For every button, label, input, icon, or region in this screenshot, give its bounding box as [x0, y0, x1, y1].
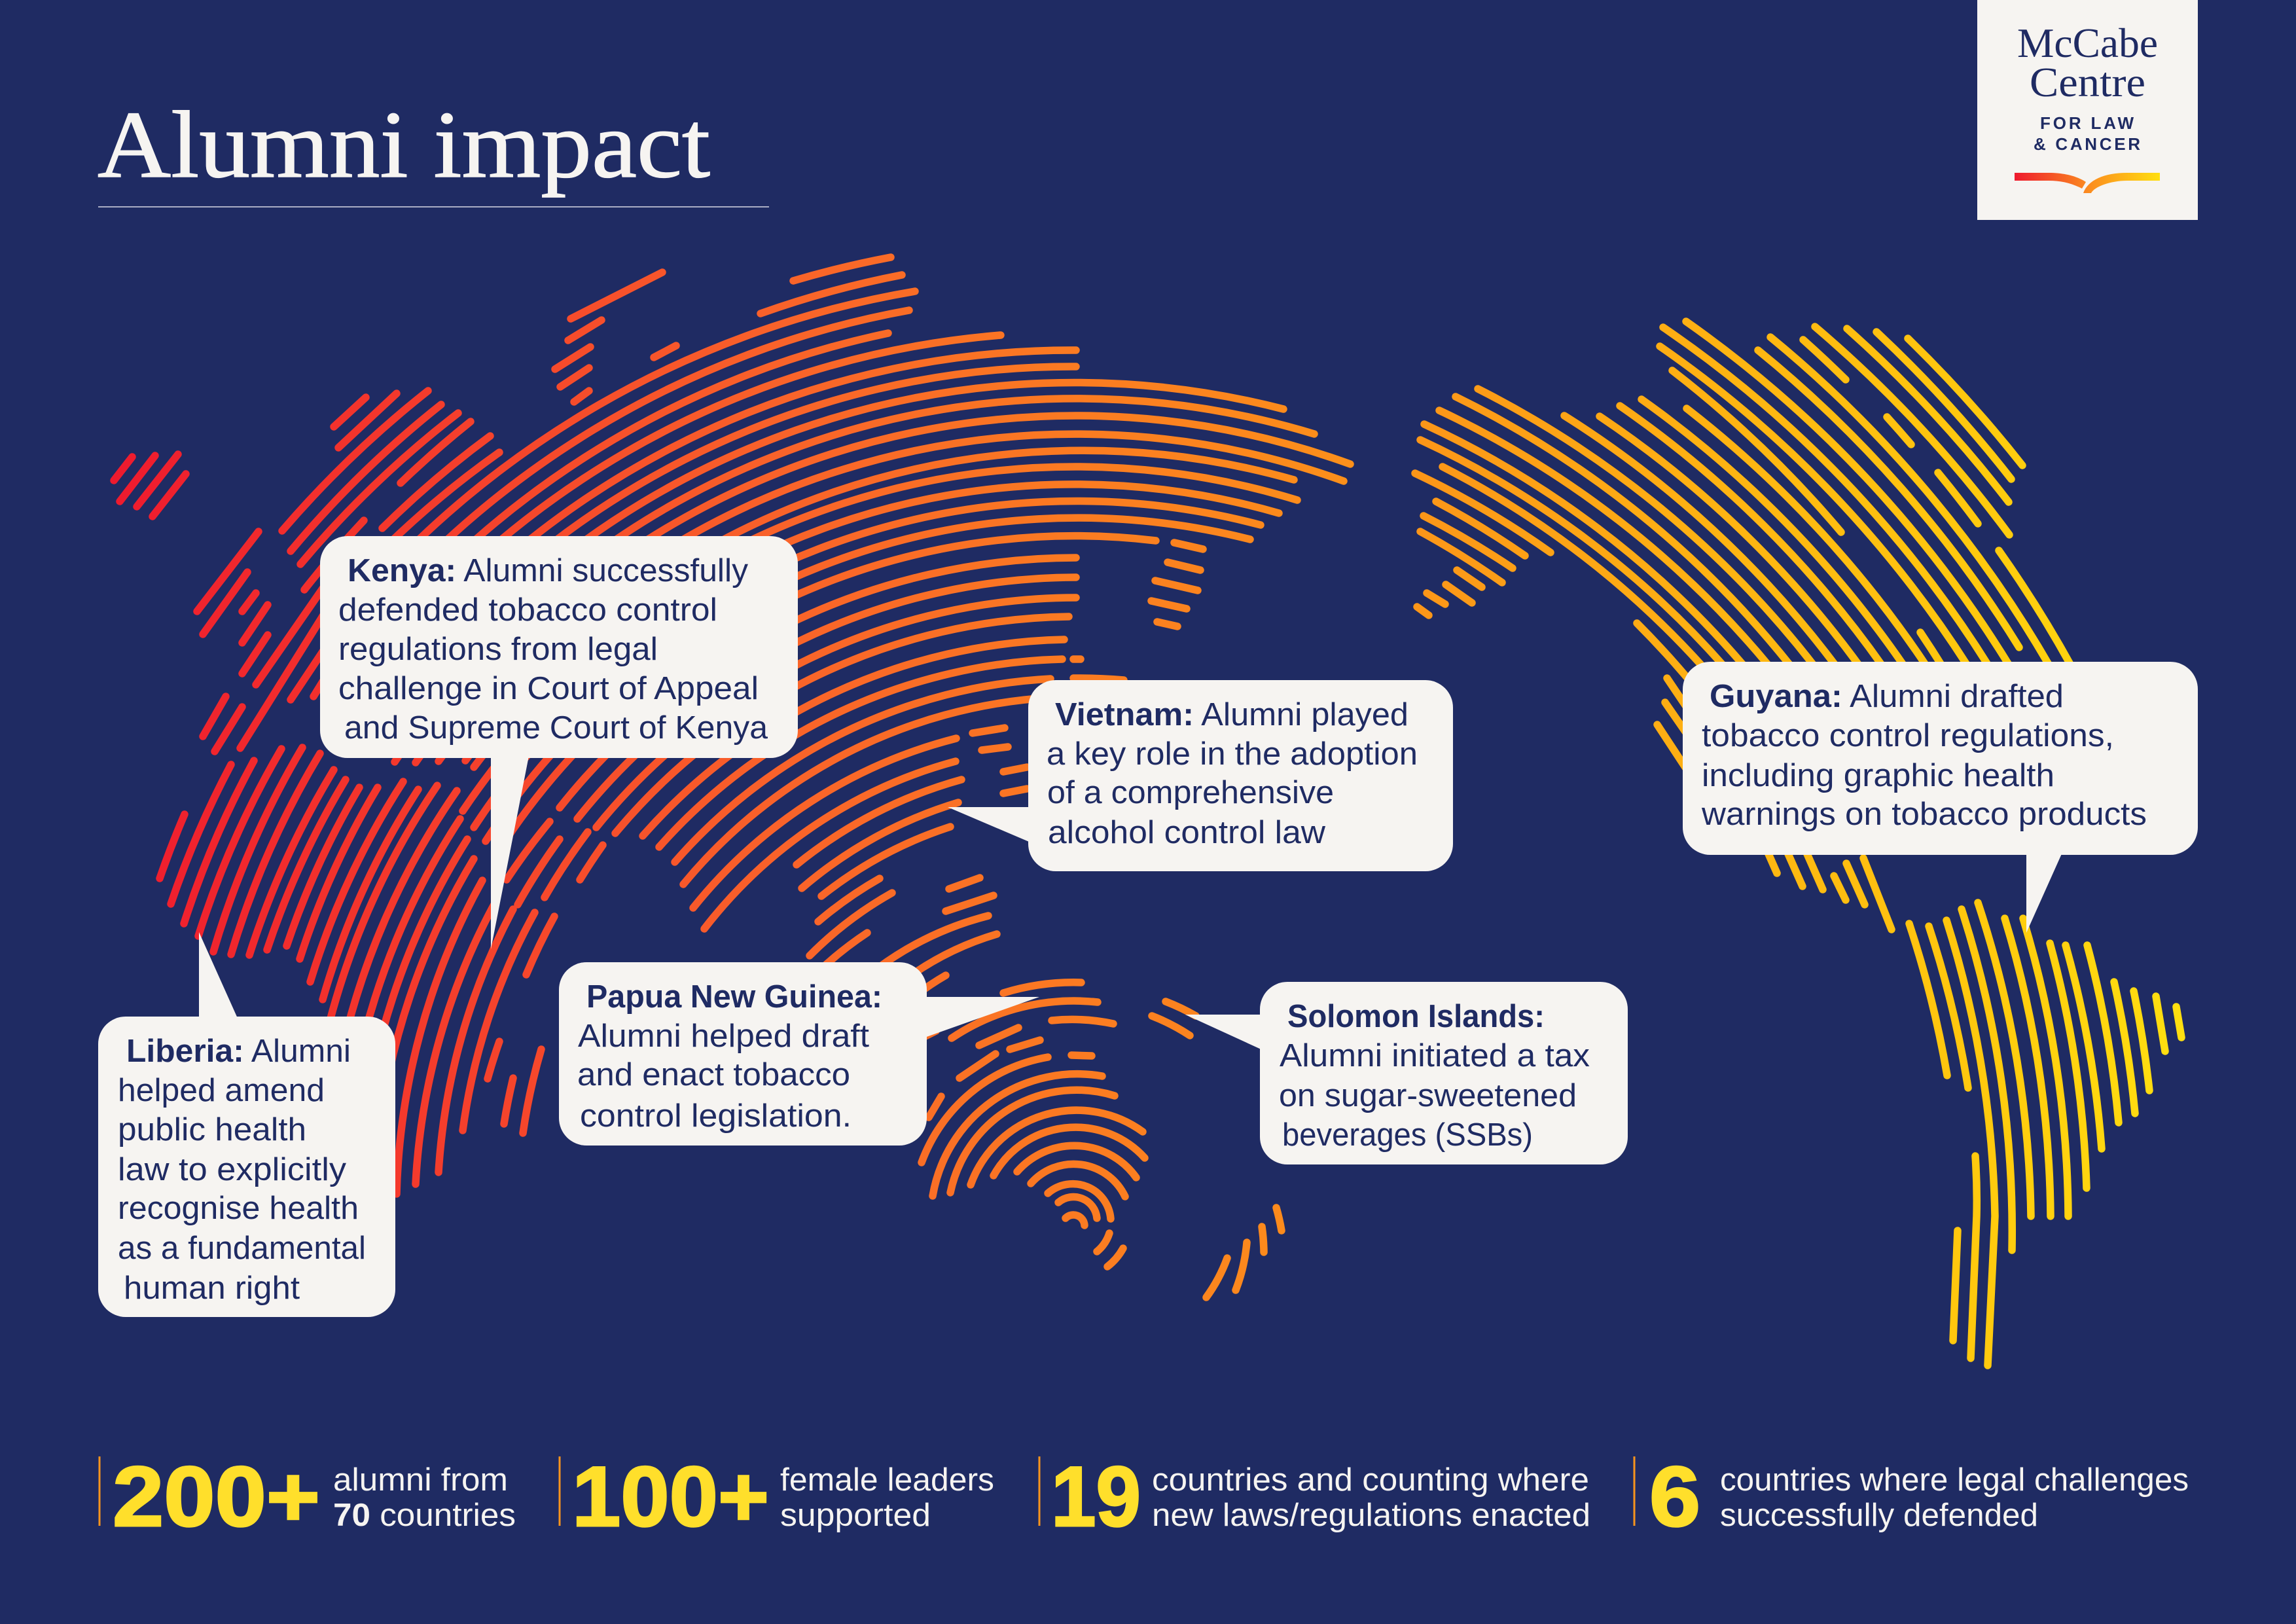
callout: Liberia: as a fundamental [118, 1231, 366, 1266]
logo: McCabe Centre for Law & Cancer: Centre [2030, 60, 2145, 105]
map: Russian Arctic fragments [555, 257, 902, 402]
callout: Liberia: human right [124, 1271, 300, 1306]
callout: Solomon Islands: Solomon Islands: [1287, 999, 1545, 1034]
stat: 100+ female leaders: female leaders [780, 1462, 994, 1498]
callout: Solomon Islands [1185, 982, 1628, 1164]
callout: Kenya: defended tobacco control [338, 592, 717, 628]
callout: Guyana [1683, 662, 2198, 933]
callout: Papua New Guinea: and enact tobacco [577, 1057, 850, 1092]
stat: 100+ female leaders [560, 1449, 994, 1544]
map: Asia sweeping rings [338, 291, 1350, 929]
callout: Guyana: tobacco control regulations, [1702, 718, 2114, 753]
callout: Vietnam [948, 680, 1453, 871]
logo: McCabe Centre for Law & Cancer: McCabe [2017, 20, 2158, 66]
callout: Kenya [320, 536, 798, 949]
stat: 100+ female leaders: supported [780, 1498, 931, 1533]
map: Africa [160, 748, 603, 1194]
callout: Vietnam: a key role in the adoption [1047, 736, 1418, 772]
map: North America [1415, 321, 2072, 772]
callout: Guyana: Guyana: Alumni drafted [1710, 679, 2064, 714]
stat: 6 countries [1634, 1449, 2189, 1544]
logo: McCabe Centre for Law & Cancer [1977, 0, 2198, 220]
callout: Liberia: public health [118, 1112, 306, 1147]
map: fingerprint-style world map [114, 257, 2181, 1365]
callout: Vietnam: Vietnam: Alumni played [1055, 697, 1408, 732]
callout: Solomon Islands: Alumni initiated a tax [1280, 1038, 1590, 1074]
map: South-East Asia [810, 728, 1027, 995]
callout: Kenya: challenge in Court of Appeal [338, 671, 759, 706]
logo: McCabe Centre for Law & Cancer: & CANCER [2034, 134, 2140, 154]
map: Papua New Guinea [916, 983, 1113, 1078]
stat: 200+ alumni: alumni from [333, 1462, 508, 1498]
callout: Solomon Islands: beverages (SSBs) [1282, 1117, 1533, 1153]
callout: Liberia [98, 932, 395, 1317]
callout: Liberia: Liberia: Alumni [126, 1034, 351, 1069]
callout: Guyana: including graphic health [1702, 758, 2054, 793]
stat: 200+ alumni: 70 countries [333, 1498, 516, 1533]
title: Alumni impact [98, 92, 710, 198]
callout: Papua New Guinea [559, 962, 1039, 1146]
callout: Kenya: and Supreme Court of Kenya [344, 710, 768, 746]
stat: 19 countries [1039, 1449, 1590, 1544]
stat: 19 countries: new laws/regulations enacted [1152, 1498, 1590, 1533]
callout: Liberia: recognise health [118, 1191, 359, 1226]
logo: McCabe Centre for Law & Cancer: FOR LAW [2040, 113, 2134, 133]
stat: 6 countries: 6 [1649, 1449, 1700, 1544]
callout: Liberia: law to explicitly [118, 1152, 347, 1187]
map: north Atlantic island [114, 454, 186, 516]
map: South America [1909, 903, 2181, 1365]
stat: 200+ alumni: 200+ [113, 1449, 320, 1544]
stat: 19 countries: countries and counting where [1152, 1462, 1589, 1498]
stat: 100+ female leaders: 100+ [572, 1449, 769, 1544]
map: Central America [1767, 851, 1892, 929]
map: Europe [197, 391, 499, 751]
callout: Kenya: Kenya: Alumni successfully [348, 553, 748, 588]
callout: Papua New Guinea: control legislation. [580, 1098, 852, 1134]
callout: Vietnam: of a comprehensive [1047, 775, 1334, 810]
stat: 6 countries: countries where legal challenges [1720, 1462, 2189, 1498]
callout: Guyana: warnings on tobacco products [1701, 797, 2147, 832]
stat: 6 countries: successfully defended [1720, 1498, 2038, 1533]
callout: Papua New Guinea: Alumni helped draft [578, 1019, 869, 1054]
callout: Papua New Guinea: Papua New Guinea: [586, 979, 882, 1015]
callout: Liberia: helped amend [118, 1073, 325, 1108]
map: Japan [1151, 543, 1203, 626]
stat: 19 countries: 19 [1051, 1449, 1141, 1544]
stat: 200+ alumni [99, 1449, 516, 1544]
callout: Vietnam: alcohol control law [1048, 815, 1326, 850]
map: New Zealand and Solomon Islands [1152, 1001, 1282, 1297]
callout: Solomon Islands: on sugar-sweetened [1279, 1078, 1577, 1113]
map: Australia fingerprint [922, 1057, 1145, 1267]
callout: Kenya: regulations from legal [338, 632, 658, 667]
